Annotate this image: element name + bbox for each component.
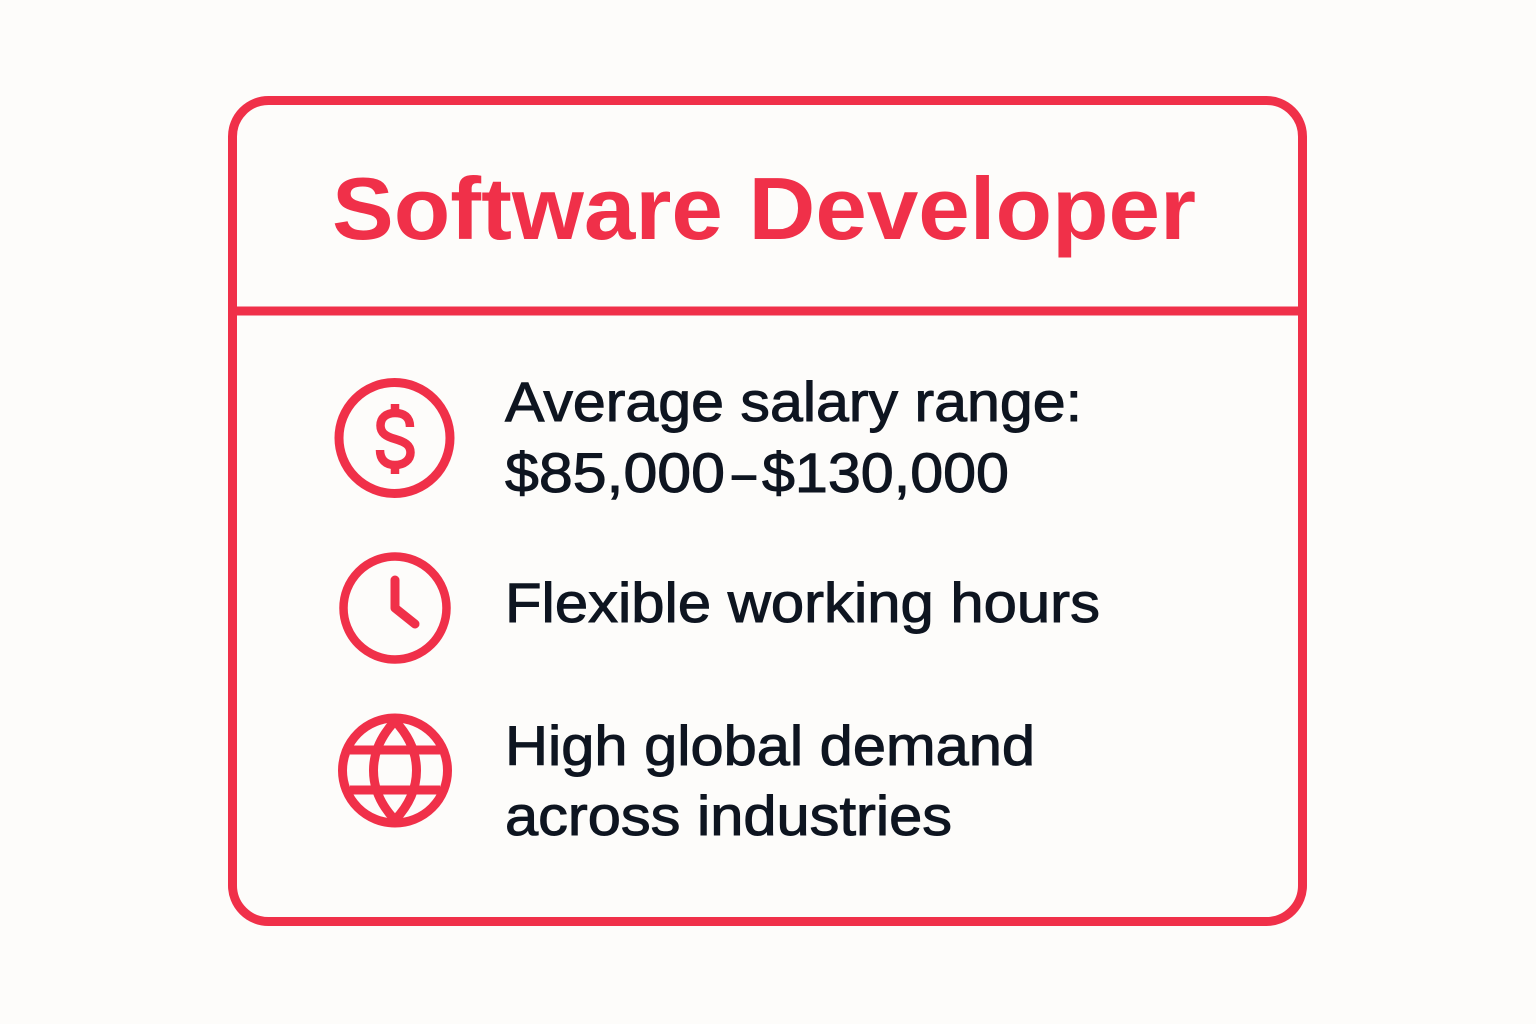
panel: software developer card xyxy=(232,100,1302,922)
text: global demand xyxy=(505,714,1035,847)
text: flexible hours: Flexible working hours xyxy=(505,571,1100,634)
text: salary range: Average salary range: xyxy=(505,370,1082,433)
text: global demand: across industries xyxy=(505,784,952,847)
icon: dollar coin xyxy=(339,382,450,494)
icon: clock xyxy=(344,556,446,660)
title: Software Developer xyxy=(332,159,1196,258)
text: global demand: High global demand xyxy=(505,714,1035,777)
icon: globe xyxy=(342,718,448,823)
text: salary range: $130,000 xyxy=(762,441,1009,504)
text: salary range: $85,000 xyxy=(505,441,725,504)
text: salary range xyxy=(505,370,1082,504)
text: salary range: – xyxy=(732,441,757,504)
